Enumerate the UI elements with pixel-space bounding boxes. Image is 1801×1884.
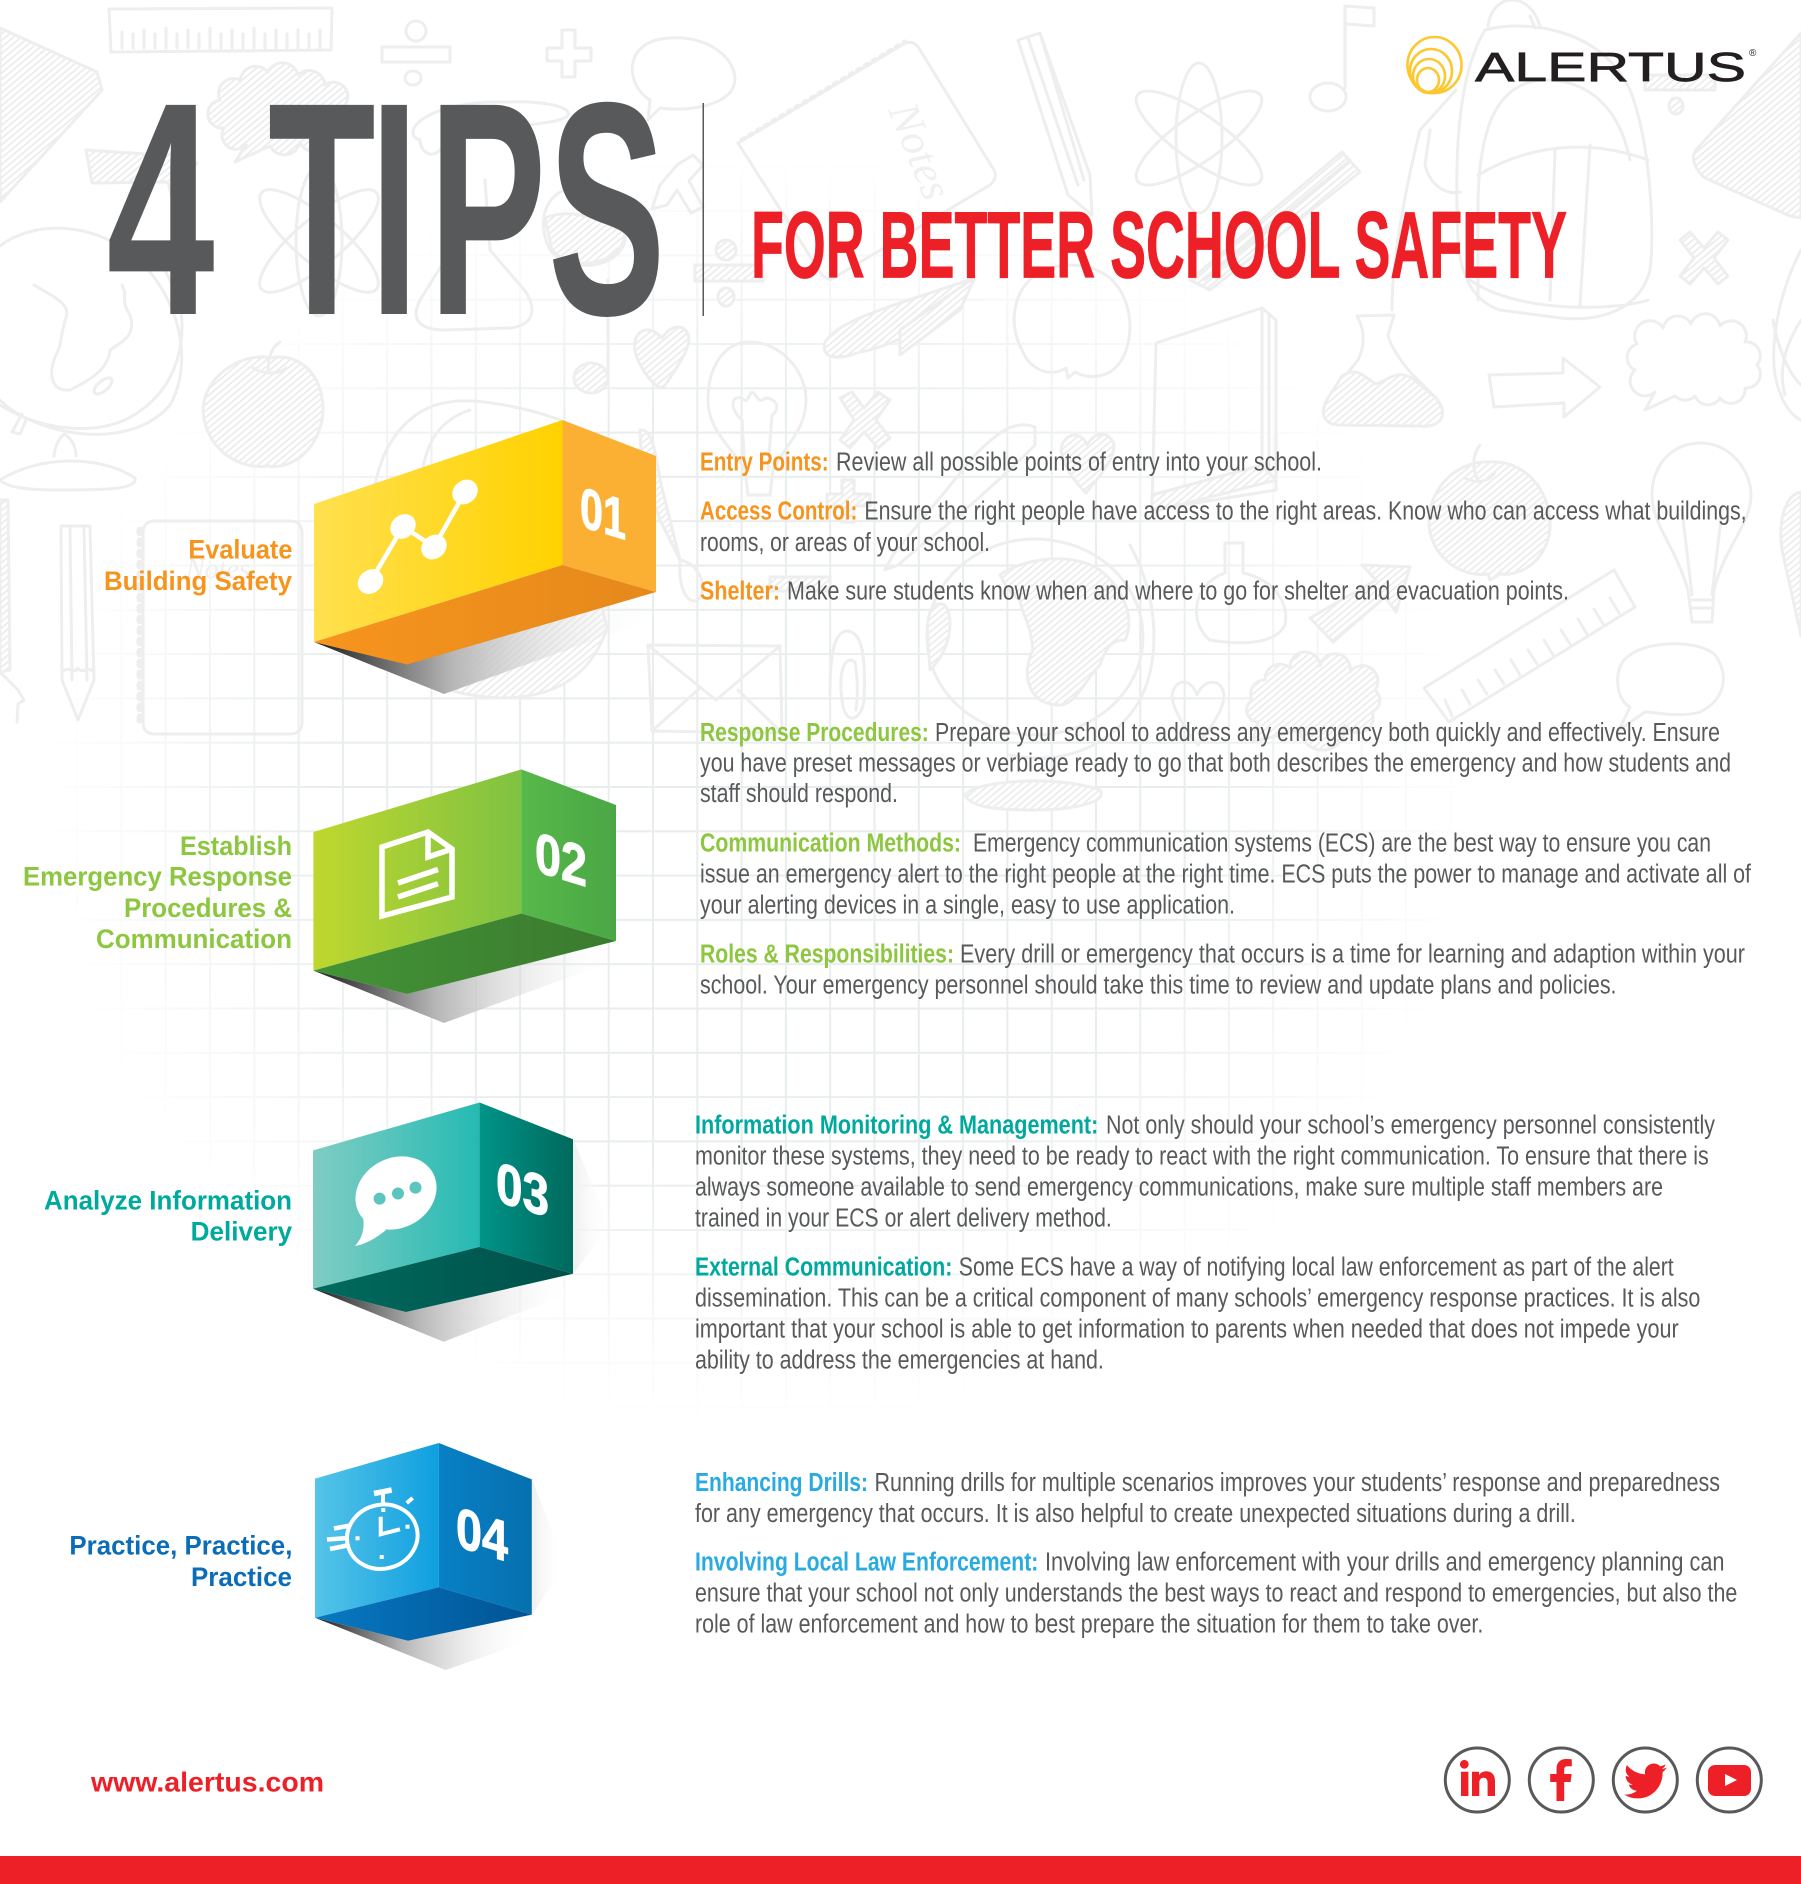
background: school doodles: Notes bbox=[878, 94, 962, 207]
icon: stopwatch bbox=[327, 1490, 425, 1577]
tip 3 text: trained in your ECS or alert delivery method. bbox=[695, 1204, 1112, 1232]
tip 2 cube bbox=[313, 769, 616, 1023]
title divider bbox=[702, 103, 704, 316]
icon: linkedin bbox=[1445, 1748, 1509, 1812]
tip 3 text: ability to address the emergencies at hand. bbox=[695, 1346, 1104, 1374]
logo: Alertus bbox=[1408, 37, 1757, 93]
icon: document bbox=[382, 832, 452, 916]
tip 4 text: role of law enforcement and how to best prepare the situation for them to take over. bbox=[695, 1610, 1483, 1638]
tip 1 text: Review all possible points of entry into your school. bbox=[836, 449, 1322, 477]
tip 2 label bbox=[23, 831, 292, 954]
tip 1 text: rooms, or areas of your school. bbox=[700, 529, 990, 557]
main title: 4 TIPS: 4 bbox=[106, 40, 215, 380]
tip 2 text: your alerting devices in a single, easy to use application. bbox=[700, 892, 1235, 920]
tip 1 text: Shelter: bbox=[700, 578, 780, 606]
tip 3 label bbox=[44, 1186, 292, 1246]
tip 1 label: Building Safety bbox=[104, 566, 292, 596]
tip 2 text: Communication Methods: bbox=[700, 830, 961, 858]
tip 2 text: Response Procedures: bbox=[700, 719, 929, 747]
tip 1 cube bbox=[314, 420, 656, 694]
logo: Alertus: ALERTUS bbox=[1475, 44, 1746, 90]
icon: youtube bbox=[1697, 1748, 1761, 1812]
tip 3 cube bbox=[313, 1102, 610, 1342]
number 03: 03 bbox=[496, 1150, 549, 1230]
tip 4 label bbox=[69, 1530, 292, 1592]
tip 2 text bbox=[700, 719, 1752, 1000]
tip 2 label: Procedures & bbox=[124, 893, 292, 923]
tip 3 text: Information Monitoring & Management: bbox=[695, 1111, 1098, 1139]
footer bar bbox=[0, 1856, 1801, 1884]
tip 4 label: Practice, Practice, bbox=[69, 1530, 292, 1560]
tip 3 label: Analyze Information bbox=[44, 1186, 292, 1216]
tip 3 label: Delivery bbox=[191, 1216, 292, 1246]
icon: speech bubble bbox=[342, 1142, 450, 1246]
tip 3 text: Some ECS have a way of notifying local law enforcement as part of the alert bbox=[959, 1253, 1674, 1281]
website url: www.alertus.com bbox=[90, 1766, 324, 1798]
tip 2 text: Roles & Responsibilities: bbox=[700, 941, 954, 969]
icon: line chart bbox=[353, 475, 483, 599]
background: school doodles bbox=[0, 0, 1801, 810]
icon: twitter bbox=[1613, 1748, 1677, 1812]
number 04: 04 bbox=[456, 1495, 508, 1575]
number 02: 02 bbox=[535, 820, 587, 900]
tip 2 label: Emergency Response bbox=[23, 862, 292, 892]
logo: Alertus: ® bbox=[1749, 48, 1757, 59]
tip 1 text bbox=[700, 449, 1747, 606]
tip 1 label: Evaluate bbox=[188, 534, 292, 564]
tip 2 text: staff should respond. bbox=[700, 780, 898, 808]
tip 2 label: Communication bbox=[96, 924, 292, 954]
tip 4 text bbox=[695, 1469, 1737, 1638]
tip 3 text bbox=[695, 1111, 1715, 1374]
tip 1 text: Entry Points: bbox=[700, 449, 829, 477]
tip 3 text: External Communication: bbox=[695, 1253, 952, 1281]
main title: 4 TIPS: TIPS bbox=[268, 39, 666, 379]
tip 4 text: Involving Local Law Enforcement: bbox=[695, 1548, 1038, 1576]
tip 2 label: Establish bbox=[180, 831, 292, 861]
tip 1 label bbox=[104, 534, 292, 596]
tip 1 text: Access Control: bbox=[700, 498, 857, 526]
tip 4 text: for any emergency that occurs. It is also helpful to create unexpected situations during a drill. bbox=[695, 1500, 1576, 1528]
tip 4 text: Enhancing Drills: bbox=[695, 1469, 868, 1497]
background: school doodles: Notes bbox=[185, 554, 250, 585]
tip 4 cube bbox=[315, 1443, 565, 1670]
tip 2 text: school. Your emergency personnel should take this time to review and update plans and policies. bbox=[700, 972, 1616, 1000]
number 01: 01 bbox=[580, 475, 626, 553]
tip 4 label: Practice bbox=[191, 1562, 292, 1592]
icon: facebook bbox=[1529, 1748, 1593, 1812]
tip 1 text: Make sure students know when and where to go for shelter and evacuation points. bbox=[787, 578, 1569, 606]
background: graph paper grid bbox=[146, 249, 1374, 1332]
